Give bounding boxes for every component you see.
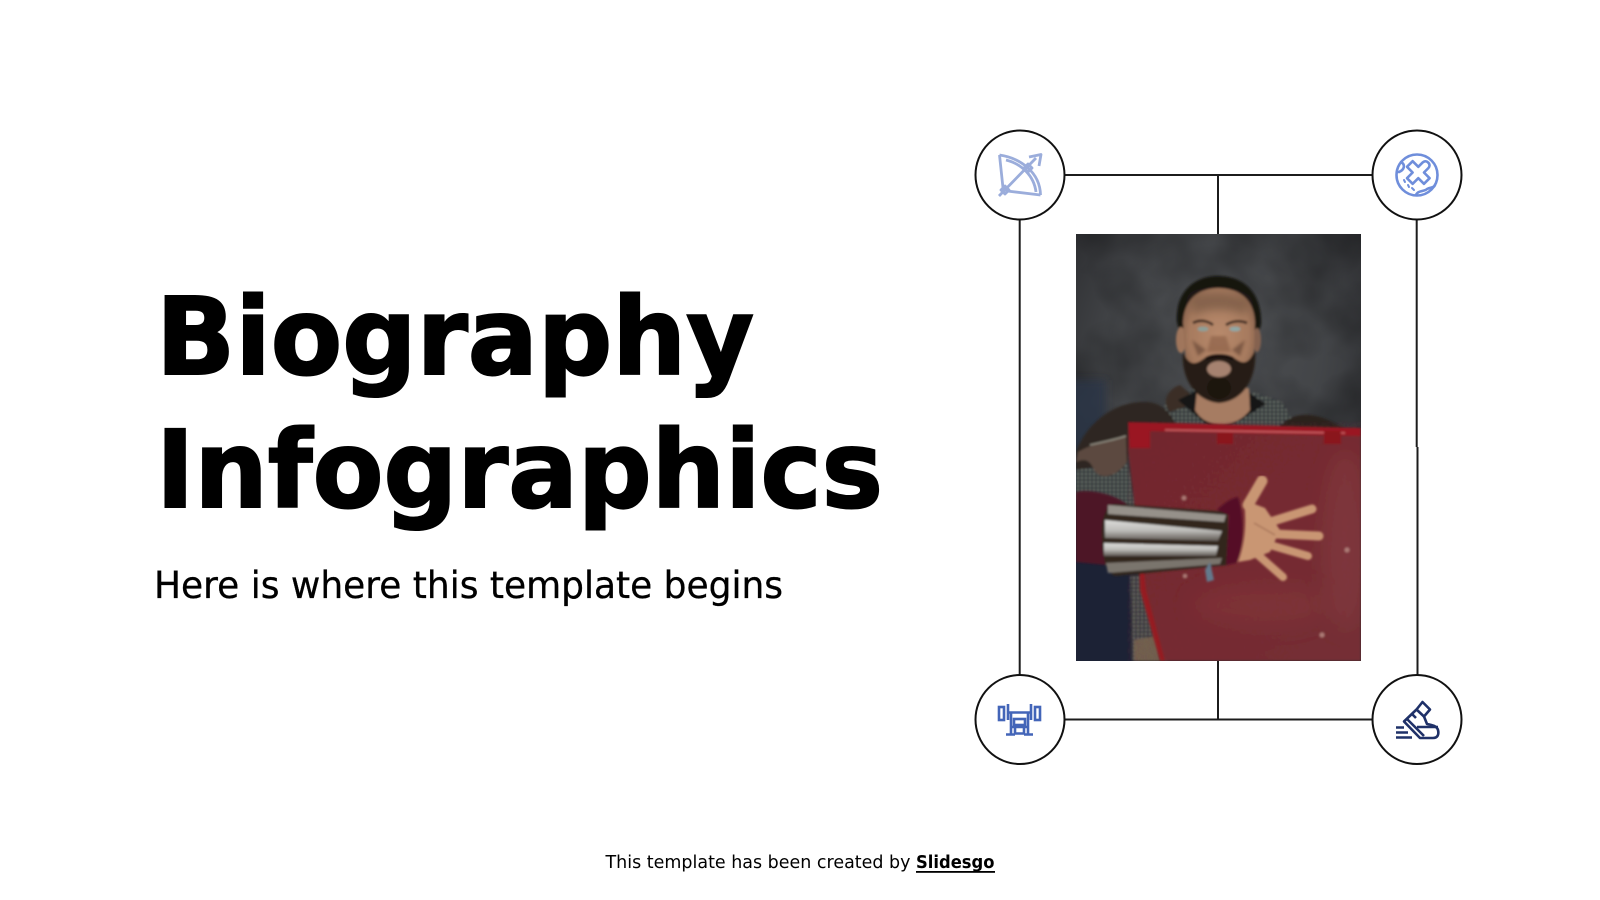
head [1176, 276, 1261, 403]
neck [1195, 388, 1250, 425]
title [156, 276, 883, 533]
slide canvas [157, 130, 1462, 873]
shield [1128, 422, 1367, 661]
icon node: globe with plane [1372, 130, 1462, 220]
photo: warrior with red shield [1066, 234, 1367, 675]
footer credit: Slidesgo [916, 852, 994, 873]
title: Biography [156, 276, 754, 400]
photo backdrop [1066, 234, 1361, 675]
arm with steel bracer and hand [1076, 481, 1319, 582]
shoulders and armour [1076, 385, 1345, 661]
connector lines [1020, 175, 1418, 720]
icon node: weight bench [976, 675, 1064, 764]
icon: weight bench [999, 704, 1040, 734]
footer credit: This template has been created by [605, 853, 910, 873]
title: Infographics [156, 409, 883, 533]
hand [1248, 481, 1319, 577]
icon node: bow and arrow [976, 130, 1064, 220]
subtitle: Here is where this template begins [154, 564, 783, 607]
icon: bow and arrow [999, 154, 1041, 196]
icon node: running shoe [1372, 675, 1462, 764]
warrior figure [1076, 276, 1345, 661]
icon: globe with plane [1396, 154, 1438, 196]
icon: running shoe [1396, 702, 1438, 738]
